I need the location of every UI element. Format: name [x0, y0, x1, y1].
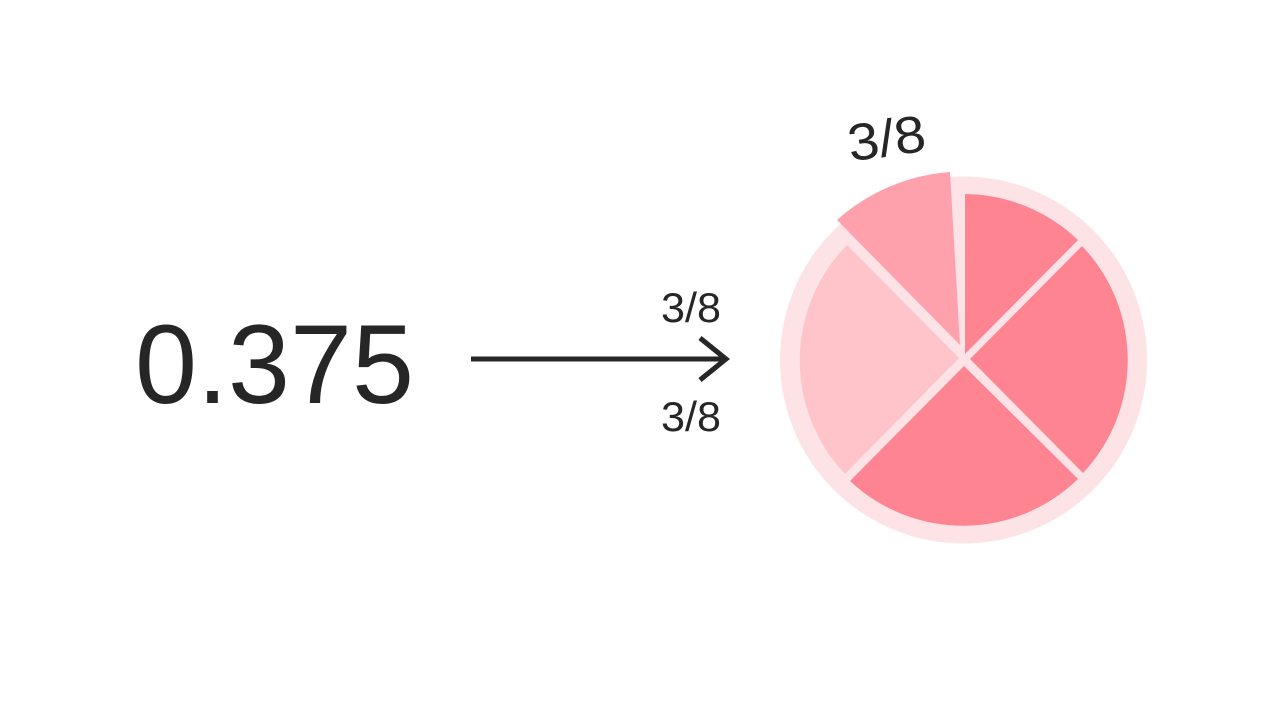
label below arrow: 3/8: [661, 393, 721, 440]
arrow: [471, 338, 726, 380]
slice: right: [970, 246, 1128, 473]
slice: left: [800, 245, 959, 474]
decimal value: 0.375: [135, 302, 414, 427]
slice: bottom: [850, 366, 1078, 526]
label above pie: 3/8: [844, 105, 929, 173]
slice: exploded top: [837, 172, 960, 345]
slice: top right: [965, 194, 1078, 354]
outer ring: [780, 176, 1147, 544]
label above arrow: 3/8: [661, 284, 721, 331]
pie chart: [780, 172, 1147, 544]
